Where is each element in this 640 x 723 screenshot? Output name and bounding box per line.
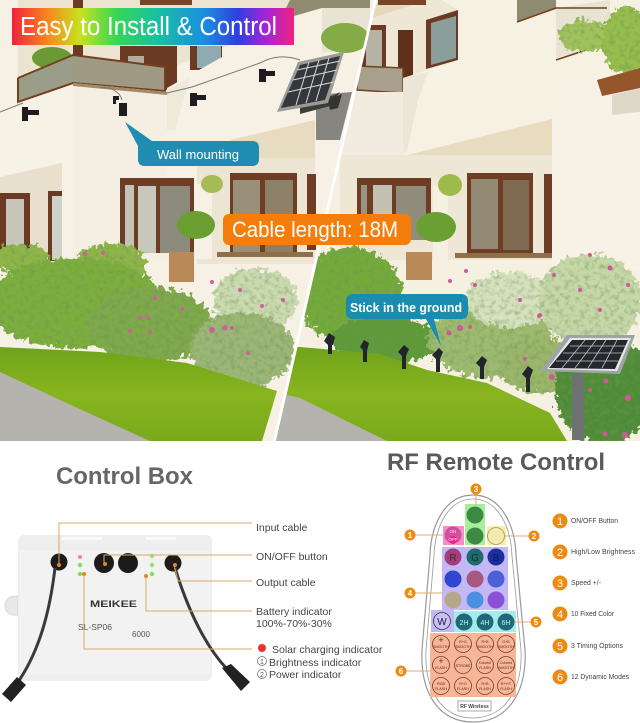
remote callout badges: 5 [534,618,539,627]
legend item 4: 10 Fixed Color [571,611,615,618]
callout: wall mounting [125,122,259,166]
stake solar panel [540,335,635,440]
fixed colours zone: R [449,553,457,564]
soffit right [230,120,315,160]
side balcony top rail [286,0,370,16]
dynamic modes zone: FLASH [435,687,447,691]
upper recess right [371,0,458,74]
photo: wall mounting scene [0,0,380,441]
legend item 3 [552,576,602,590]
label: on/off button: ON/OFF button [256,551,328,563]
lower left recess [0,163,62,262]
dynamic modes zone: R+Y/T [501,682,512,686]
white diagonal balcony slab [167,57,222,90]
upper railing right [357,66,403,93]
dynamic modes zone: SMOOTH [498,666,514,670]
callout: stick in the ground: Stick in the ground [350,301,462,315]
left cable [2,568,55,702]
remote callout badges: 4 [408,589,413,598]
RF wireless tag: RF Wireless [460,704,489,710]
legend item 3: 3 [557,578,563,590]
wall lights [22,69,275,121]
lower left door [0,193,30,253]
label: brightness indicator: 1 [260,659,264,666]
upper balcony railing [18,55,165,102]
label: battery percentages: 100%-70%-30% [256,618,332,630]
remote callout badges: 6 [399,667,404,676]
speed zone [465,504,485,545]
dynamic modes zone: G+B [502,640,510,644]
hedge left [0,243,297,388]
grass left [0,347,277,441]
mounting ear [5,596,18,615]
heading: control box: Control Box [56,463,194,490]
ground floor windows right [357,173,552,258]
dynamic modes zone: STROBE [456,664,471,668]
leader dots [57,562,177,578]
dynamic modes zone: R+B [481,682,489,686]
legend item 2: 2 [557,547,563,559]
hedge right [298,247,640,444]
remote callout badges: 3 [474,485,479,494]
label: power indicator: 2 [260,672,264,679]
model: SL-SP06 [78,622,112,632]
title banner: Easy to Install & Control [20,13,277,41]
roof corner [597,68,640,96]
wall wires [0,57,300,112]
callout: wall mounting: Wall mounting [157,148,239,162]
leader lines [59,523,252,649]
dynamic modes zone: + [438,656,444,666]
dynamic modes zone: FLASH [435,666,447,670]
dynamic modes zone: R+G [459,640,467,644]
legend item 4: 4 [557,609,563,621]
timing zone [454,611,516,632]
photo: ground stake scene [270,0,640,444]
flowers right [446,253,631,438]
dynamic modes zone: SMOOTH [433,645,449,649]
potted plant [169,175,223,282]
legend item 1: 1 [557,516,563,528]
remote callout lines [406,494,531,671]
on/off zone: ON [450,529,456,534]
white button zone [431,610,454,632]
ground floor window centre [120,178,194,253]
label: output cable: Output cable [256,577,316,589]
lower left narrow door [48,191,62,261]
legend item 4 [552,606,615,622]
column right [342,92,403,150]
ground floor window right [230,173,316,255]
label: battery indicator: Battery indicator [256,606,332,618]
dynamic modes zone: FLASH [457,687,469,691]
timing zone: 2H [460,620,468,627]
dynamic modes zone: FLASH [479,666,491,670]
dynamic modes zone: Colorful [479,661,491,665]
legend item 3: Speed +/- [571,580,602,587]
flowers left [83,251,285,355]
upper balcony doors [73,0,222,90]
balcony plants right [406,174,462,280]
shadow of panel [316,92,352,140]
timing zone: 4H [481,620,489,627]
box body [18,535,212,681]
dynamic modes zone: SMOOTH [498,645,514,649]
timing zone: 6H [502,620,510,627]
label: input cable: Input cable [256,522,308,534]
on/off zone [443,526,464,545]
brand: MEIKEE [90,599,137,609]
path left [0,372,150,441]
remote callout badges [396,484,542,676]
fixed colours zone: B [493,553,500,564]
remote outline [422,495,525,722]
remote control [422,495,525,722]
dynamic modes zone: FLASH [479,687,491,691]
upper recess [18,0,300,78]
label: brightness indicator: Brightness indicator [269,657,362,669]
label: power indicator: Power indicator [269,669,342,681]
fixed colours zone: G [471,553,479,564]
legend item 5 [552,638,623,654]
dynamic modes zone: Colorful [500,661,512,665]
wall solar panel [277,52,344,114]
upper doors right [362,10,458,78]
upper right plants [558,6,640,74]
legend item 1: ON/OFF Button [571,518,618,525]
dynamic modes zone: FLASH [500,687,512,691]
callout: stick in the ground [346,294,468,346]
on/off zone: OFF [448,537,458,542]
capacity: 6000 [132,630,151,639]
upper balcony plant [32,47,72,69]
legend item 6 [552,670,629,684]
grass right [270,347,567,441]
label: solar charging indicator: Solar charging indicator [272,644,383,656]
ground lights [324,333,533,392]
indicator LEDs [78,554,154,576]
RF wireless tag [458,701,491,711]
remote callout badges: 2 [532,532,537,541]
remote callout badges: 1 [408,531,413,540]
fixed colours zone [442,547,508,610]
brightness zone [487,526,506,545]
heading: RF remote control: RF Remote Control [387,449,605,476]
legend item 2 [552,544,635,560]
legend item 5: 3 Timing Options [571,643,623,650]
white button zone: W [437,617,447,628]
callout: cable length: Cable length: 18M [232,217,398,242]
legend item 1 [552,514,618,528]
box holes [50,553,182,573]
path right [276,394,387,441]
dynamic modes zone: SMOOTH [455,645,471,649]
upper right balcony [517,0,610,60]
dynamic modes zone: R+B [481,640,489,644]
side balcony plant [321,23,369,53]
dynamic modes zone: + [438,635,444,645]
white slab right [403,60,458,78]
dynamic modes zone: RGB [437,682,445,686]
control box device [2,535,250,702]
legend: remote functions [552,514,635,684]
legend item 6: 12 Dynamic Modes [571,674,629,681]
dynamic modes zone: R+G [459,682,467,686]
right cable [175,568,250,691]
legend item 6: 6 [557,672,563,684]
soffit right [407,119,552,158]
dynamic modes zone: SMOOTH [477,645,493,649]
dynamic modes zone [430,633,516,697]
legend item 2: High/Low Brightness [571,549,635,556]
side balcony [322,8,370,53]
legend item 5: 5 [557,641,563,653]
